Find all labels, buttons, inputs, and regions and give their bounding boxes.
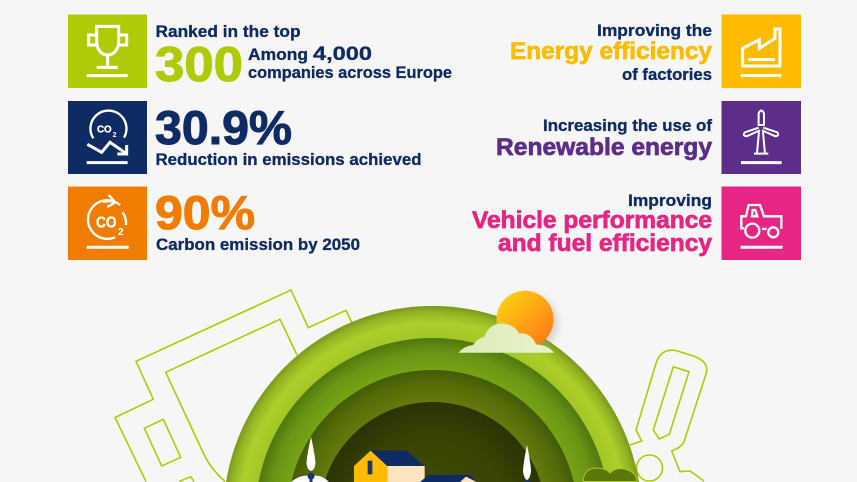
goal: vehicle performance and fuel efficiency [472,186,801,260]
outline: fuel pump silhouette [115,290,352,482]
text: carbon emission by 2050: Carbon emission by 2050 [156,236,360,254]
number: 30.9%: 30.9% [155,101,292,154]
stat: ranked in the top 300 [68,14,452,92]
text: of factories: of factories [622,66,712,84]
heading: energy efficiency: Energy efficiency [510,38,713,65]
illustration: left wind turbine [291,437,329,482]
heading: vehicle performance and fuel efficiency [472,207,713,257]
text: improving: Improving [628,192,712,210]
text: among 4,000 companies across Europe: Among [248,46,308,64]
icon: CO2 cycle: CO [96,215,117,232]
text: among 4,000 companies across Europe: 4,000 [313,44,372,65]
icon: CO2 falling arrow [68,101,147,174]
text: among 4,000 companies across Europe [248,44,452,82]
text: improving the: Improving the [597,22,712,40]
illustration: right wind turbine [523,445,531,482]
stat: 90% carbon emission [68,186,360,260]
number: 300: 300 [155,38,243,92]
text: increasing the use of: Increasing the use of [543,117,713,135]
icon: cloud [458,323,554,353]
heading: vehicle performance and fuel efficiency: and fuel efficiency [498,230,713,257]
goal: energy efficiency of factories [510,14,801,88]
icon: trophy [68,14,147,88]
icon: CO2 falling arrow: 2 [113,132,117,139]
heading: renewable energy: Renewable energy [496,134,713,161]
illustration: green paper-cut arches [226,306,639,482]
stat: 30.9% reduction [68,101,422,174]
icon: tractor [722,186,801,260]
illustration: tree [583,468,637,482]
goal: renewable energy [496,101,801,174]
icon: sun [496,291,558,352]
text: ranked in the top: Ranked in the top [156,23,300,41]
icon: wind turbine [722,101,801,174]
icon: CO2 cycle: 2 [118,227,124,238]
heading: vehicle performance and fuel efficiency: Vehicle performance [472,207,712,234]
outline: fuel nozzle silhouette [630,350,707,481]
text: reduction in emissions achieved: Reduction in emissions achieved [156,151,422,169]
illustration: houses [354,451,477,482]
text: among 4,000 companies across Europe: companies across Europe [248,64,452,82]
number: 90%: 90% [155,186,255,239]
icon: factory [722,14,801,88]
icon: CO2 falling arrow: CO [97,124,112,135]
icon: CO2 cycle [68,186,147,260]
